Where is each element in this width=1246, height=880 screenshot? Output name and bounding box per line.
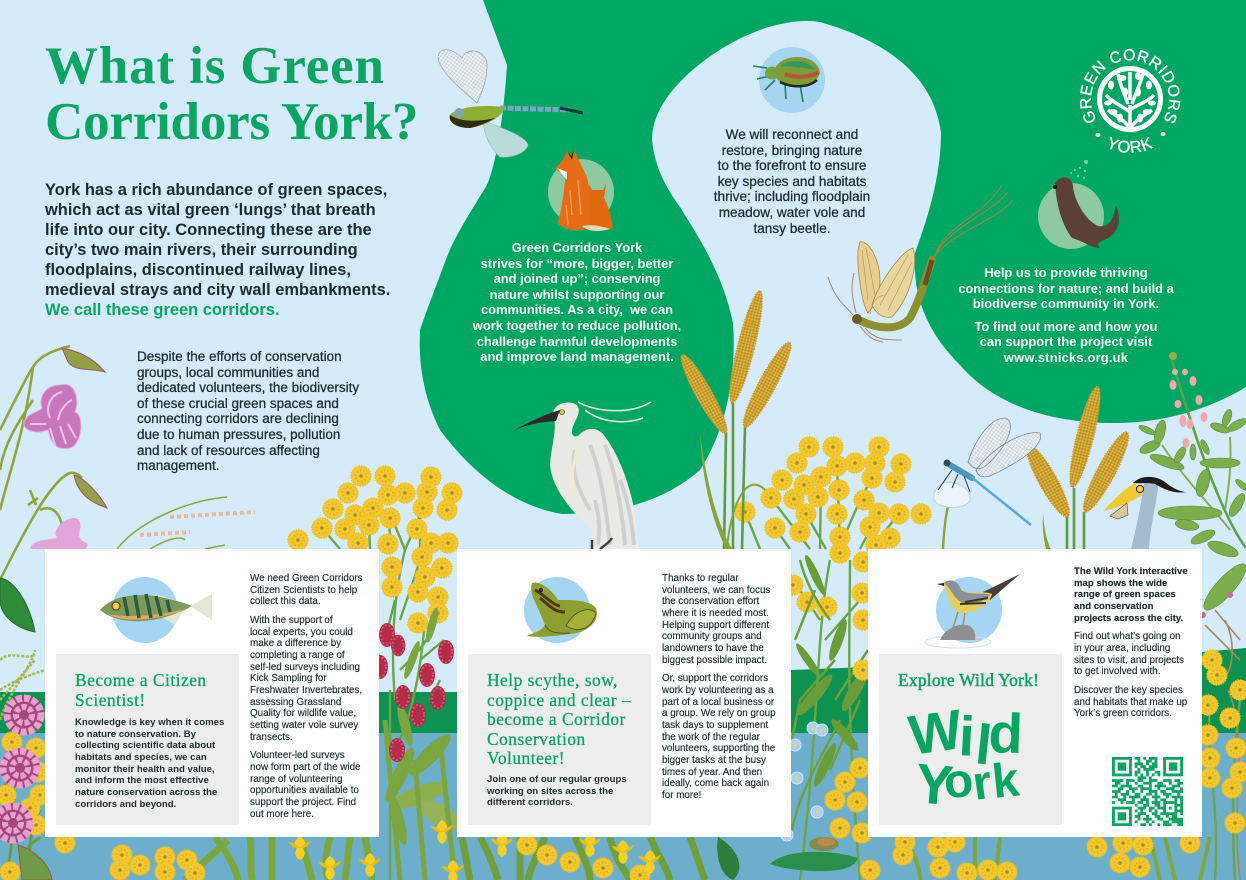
- text: green blob strategy: challenge harmful developments: [477, 334, 677, 349]
- cluster: forget-me-nots: [781, 722, 828, 841]
- intro text: [45, 181, 390, 319]
- text: Wild York map details: map shows the wide: [1074, 578, 1167, 589]
- text: help us and web address: [958, 265, 1174, 365]
- text: join a regular group: different corridors.: [487, 797, 573, 808]
- text: green blob strategy: [472, 240, 681, 364]
- text: volunteer details: where it is needed most.: [662, 608, 769, 619]
- icon: daisy bud: [934, 482, 970, 549]
- text: help us and web address: biodiverse community in York. To find out more and how you: [973, 296, 1159, 334]
- text: volunteer details: the conservation effort: [662, 596, 759, 607]
- heading: Explore Wild York: Explore Wild York!: [898, 670, 1039, 690]
- text: citizen scientist details: With the support of: [250, 615, 333, 626]
- cluster: tansy flowers lower gap: [825, 610, 873, 843]
- text: knowledge is key: and inform the most effective: [75, 775, 209, 786]
- text: biodiversity declining: management.: [137, 458, 220, 473]
- text: volunteer details: task days to supplement: [662, 720, 768, 731]
- text: knowledge is key: [75, 717, 224, 810]
- text: reconnect and restore: We will reconnect and: [726, 127, 858, 142]
- text: Wild York map details: in your area, including: [1074, 643, 1170, 654]
- text: Wild York map details: sites to visit, and projects: [1074, 655, 1184, 666]
- plant: grass with seed heads at left: [0, 497, 255, 720]
- text: Wild York map details: and habitats that make up: [1074, 697, 1187, 708]
- text: biodiversity declining: of these crucial green spaces and: [137, 396, 339, 411]
- text: green blob strategy: work together to reduce pollution,: [473, 318, 681, 333]
- text: join a regular group: [487, 774, 627, 808]
- logo: Green Corridors York roundel: YORK: [1110, 136, 1154, 153]
- logo: Green Corridors York roundel: GREEN CORRIDORS: [1080, 49, 1180, 124]
- text: Wild York map details: The Wild York interactive: [1074, 566, 1188, 577]
- text: Wild York map details: York’s green corridors.: [1074, 708, 1172, 719]
- text: biodiversity declining: dedicated volunteers, the biodiversity: [137, 380, 359, 395]
- heading: Help scythe sow coppice and clear: [486, 670, 631, 768]
- icon: pink balsam flower: [24, 384, 81, 449]
- text: citizen scientist details: transects.: [250, 732, 293, 743]
- text: citizen scientist details: Quality for wildlife value,: [250, 708, 356, 719]
- text: Wild York map details: Find out what’s going on: [1074, 631, 1181, 642]
- plant: left edge yellow and pink blooms: [0, 695, 52, 880]
- text: Wild York map details: range of green spaces: [1074, 589, 1176, 600]
- icon: yellow iris: [431, 820, 453, 844]
- icon: nettle leaf at left edge: [0, 578, 35, 632]
- text: volunteer details: Thanks to regular: [662, 573, 739, 584]
- plant: right hedge woundwort with pink spike: [1138, 352, 1246, 880]
- text: reconnect and restore: tansy beetle.: [753, 221, 831, 236]
- icon: little egret: [513, 402, 651, 549]
- plant: dark green leaf at bottom centre: [717, 837, 739, 880]
- panel: corridor conservation volunteer: [457, 549, 791, 837]
- intro text: We call these green corridors.: [45, 301, 279, 319]
- plant: leaves between first and second panels: [381, 607, 466, 880]
- plant: leaves between second and third panels: [792, 553, 872, 830]
- icon: hawker dragonfly: [438, 50, 583, 157]
- intro text: medieval strays and city wall embankments.: [45, 281, 390, 299]
- heading: Become a Citizen Scientist: [75, 670, 207, 710]
- text: Wild York map details: and conservation: [1074, 601, 1153, 612]
- text: volunteer details: the work of the regular: [662, 732, 760, 743]
- river water band: [0, 732, 1246, 880]
- text: green blob strategy: strives for “more, bigger, better: [481, 256, 673, 271]
- icon: stickleback fish: [100, 577, 212, 643]
- text: biodiversity declining: Despite the efforts of conservation: [137, 349, 342, 364]
- intro text: life into our city. Connecting these are the: [45, 221, 372, 239]
- text: green blob strategy: communities. As a city, we can: [481, 302, 673, 317]
- text: knowledge is key: corridors and beyond.: [75, 799, 176, 810]
- text: volunteer details: times of year. And then: [662, 767, 762, 778]
- text: green blob strategy: Green Corridors York: [512, 240, 642, 255]
- icon: heron head with fish: [1103, 477, 1187, 549]
- text: citizen scientist details: opportunities available to: [250, 785, 359, 796]
- heading: Help scythe sow coppice and clear: become a Corridor: [487, 709, 626, 729]
- text: volunteer details: ideally, come back again: [662, 778, 769, 789]
- text: knowledge is key: Knowledge is key when it comes: [75, 717, 224, 728]
- text: Wild York map details: projects across the city.: [1074, 613, 1183, 624]
- icon: QR code: [1112, 757, 1183, 826]
- text: citizen scientist details: local experts, you could: [250, 627, 353, 638]
- panel: explore Wild York: [868, 549, 1202, 837]
- text: volunteer details: for more!: [662, 790, 701, 801]
- text: reconnect and restore: meadow, water vole and: [719, 205, 865, 220]
- tansy stems: [322, 466, 1240, 880]
- text: citizen scientist details: Freshwater Invertebrates,: [250, 685, 362, 696]
- text: citizen scientist details: out more here.: [250, 809, 314, 820]
- cluster: tansy flowers left: [288, 466, 462, 633]
- heading: Help scythe sow coppice and clear: Help scythe, sow,: [487, 670, 618, 690]
- text: volunteer details: [662, 573, 776, 801]
- icon: otter with bubbles: [1038, 160, 1119, 249]
- heading: Become a Citizen Scientist: Become a Citizen: [75, 670, 207, 690]
- panel: volunteer heading box: [468, 654, 651, 825]
- text: volunteer details: bigger tasks at the busy: [662, 755, 766, 766]
- text: volunteer details: community groups and: [662, 631, 762, 642]
- cluster: tansy flowers centre: [735, 437, 931, 617]
- intro text: city’s two main rivers, their surrounding: [45, 241, 358, 259]
- text: help us and web address: connections for nature; and build a: [958, 281, 1174, 296]
- text: help us and web address: can support the project visit: [980, 334, 1152, 349]
- intro text: floodplains, discontinued railway lines,: [45, 261, 351, 279]
- text: citizen scientist details: We need Green Corridors: [250, 573, 363, 584]
- intro text: York has a rich abundance of green spaces,: [45, 181, 387, 199]
- text: volunteer details: a group. We rely on group: [662, 708, 776, 719]
- text: help us and web address: www.stnicks.org.uk: [1004, 350, 1128, 365]
- plant: foreground grass ears right: [1020, 384, 1135, 549]
- text: citizen scientist details: range of volunteering: [250, 774, 342, 785]
- text: Wild York map details: Discover the key species: [1074, 685, 1183, 696]
- text: knowledge is key: habitats and species, we can: [75, 752, 207, 763]
- text: citizen scientist details: Volunteer-led surveys: [250, 750, 345, 761]
- cluster: tansy flowers far right: [1198, 650, 1246, 833]
- text: help us and web address: Help us to provide thriving: [984, 265, 1148, 280]
- panel: Wild York heading box: [879, 654, 1062, 825]
- text: volunteer details: volunteers, we can focus: [662, 585, 770, 596]
- plant: foreground grass ears centre: [675, 289, 797, 549]
- icon: damselfly: [938, 418, 1041, 525]
- text: join a regular group: Join one of our regular groups: [487, 774, 627, 785]
- icon: grey wagtail on rock: [924, 574, 1020, 648]
- text: citizen scientist details: Citizen Scientists to help: [250, 585, 357, 596]
- text: volunteer details: biggest possible impact.: [662, 655, 767, 666]
- text: volunteer details: Or, support the corridors: [662, 673, 768, 684]
- icon: mayfly: [828, 185, 1013, 342]
- text: citizen scientist details: self-led surveys including: [250, 662, 360, 673]
- text: citizen scientist details: assessing Grassland: [250, 697, 341, 708]
- text: knowledge is key: collecting scientific data about: [75, 740, 215, 751]
- panel: citizen scientist heading box: [56, 654, 239, 825]
- text: citizen scientist details: [250, 573, 363, 820]
- text: volunteer details: landowners to have the: [662, 643, 764, 654]
- text: volunteer details: Helping support different: [662, 620, 769, 631]
- green blob background: [420, 0, 1246, 514]
- heading: Help scythe sow coppice and clear: Conservation: [487, 729, 586, 749]
- plant: bottom grass blades: [185, 837, 1210, 880]
- title: [45, 37, 418, 151]
- text: biodiversity declining: and lack of resources affecting: [137, 443, 320, 458]
- icon: beetle on lily leaf: [770, 837, 858, 871]
- text: green blob strategy: and improve land management.: [480, 349, 674, 364]
- text: biodiversity declining: due to human pressures, pollution: [137, 427, 340, 442]
- text: citizen scientist details: completing a range of: [250, 650, 345, 661]
- icon: tansy beetle: [753, 47, 825, 113]
- text: citizen scientist details: support the project. Find: [250, 797, 356, 808]
- text: citizen scientist details: make a difference by: [250, 638, 341, 649]
- text: knowledge is key: monitor their health and value,: [75, 764, 215, 775]
- title: What is Green: [45, 37, 385, 95]
- text: biodiversity declining: connecting corridors are declining: [137, 411, 339, 426]
- text: reconnect and restore: restore, bringing nature: [722, 143, 862, 158]
- text: citizen scientist details: collect this data.: [250, 596, 321, 607]
- title: Corridors York?: [45, 93, 418, 151]
- text: volunteer details: part of a local business or: [662, 697, 774, 708]
- text: Wild York map details: to get involved with.: [1074, 666, 1160, 677]
- heading: Help scythe sow coppice and clear: Volunteer!: [487, 748, 565, 768]
- panel: citizen scientist: [45, 549, 379, 837]
- heading: Become a Citizen Scientist: Scientist!: [75, 690, 146, 710]
- text: biodiversity declining: groups, local communities and: [137, 365, 319, 380]
- text: biodiversity declining: [137, 349, 360, 474]
- text: knowledge is key: nature conservation across the: [75, 787, 217, 798]
- logo: Wild York wordmark: ork: [942, 753, 1022, 811]
- text: green blob strategy: and joined up”; conserving: [494, 271, 660, 286]
- text: reconnect and restore: [714, 127, 870, 236]
- text: Wild York map details: [1074, 566, 1188, 719]
- text: reconnect and restore: key species and habitats: [718, 174, 866, 189]
- text: volunteer details: volunteers, supporting the: [662, 743, 775, 754]
- text: citizen scientist details: now form part of the wide: [250, 762, 361, 773]
- plant: left balsam with buds and flowers: [0, 346, 107, 580]
- icon: fox and cub: [548, 150, 614, 231]
- text: reconnect and restore: thrive; including floodplain: [714, 189, 870, 204]
- cluster: tansy flowers bottom strip: [0, 832, 1200, 880]
- text: reconnect and restore: to the forefront to ensure: [718, 158, 866, 173]
- text: green blob strategy: nature whilst supporting our: [490, 287, 664, 302]
- text: citizen scientist details: Kick Sampling for: [250, 673, 327, 684]
- intro text: which act as vital green ‘lungs’ that breath: [45, 201, 376, 219]
- text: citizen scientist details: setting water vole survey: [250, 720, 358, 731]
- text: volunteer details: work by volunteering as a: [662, 685, 774, 696]
- cluster: yellow iris flowers bottom: [289, 833, 661, 880]
- cluster: red great burnet heads: [372, 623, 454, 762]
- heading: Help scythe sow coppice and clear: coppice and clear –: [487, 690, 631, 710]
- icon: frog: [524, 577, 597, 643]
- far bank green band: [0, 648, 1246, 733]
- text: join a regular group: working on sites across the: [487, 786, 613, 797]
- text: knowledge is key: to nature conservation. By: [75, 729, 196, 740]
- logo: Wild York wordmark: [905, 704, 1024, 814]
